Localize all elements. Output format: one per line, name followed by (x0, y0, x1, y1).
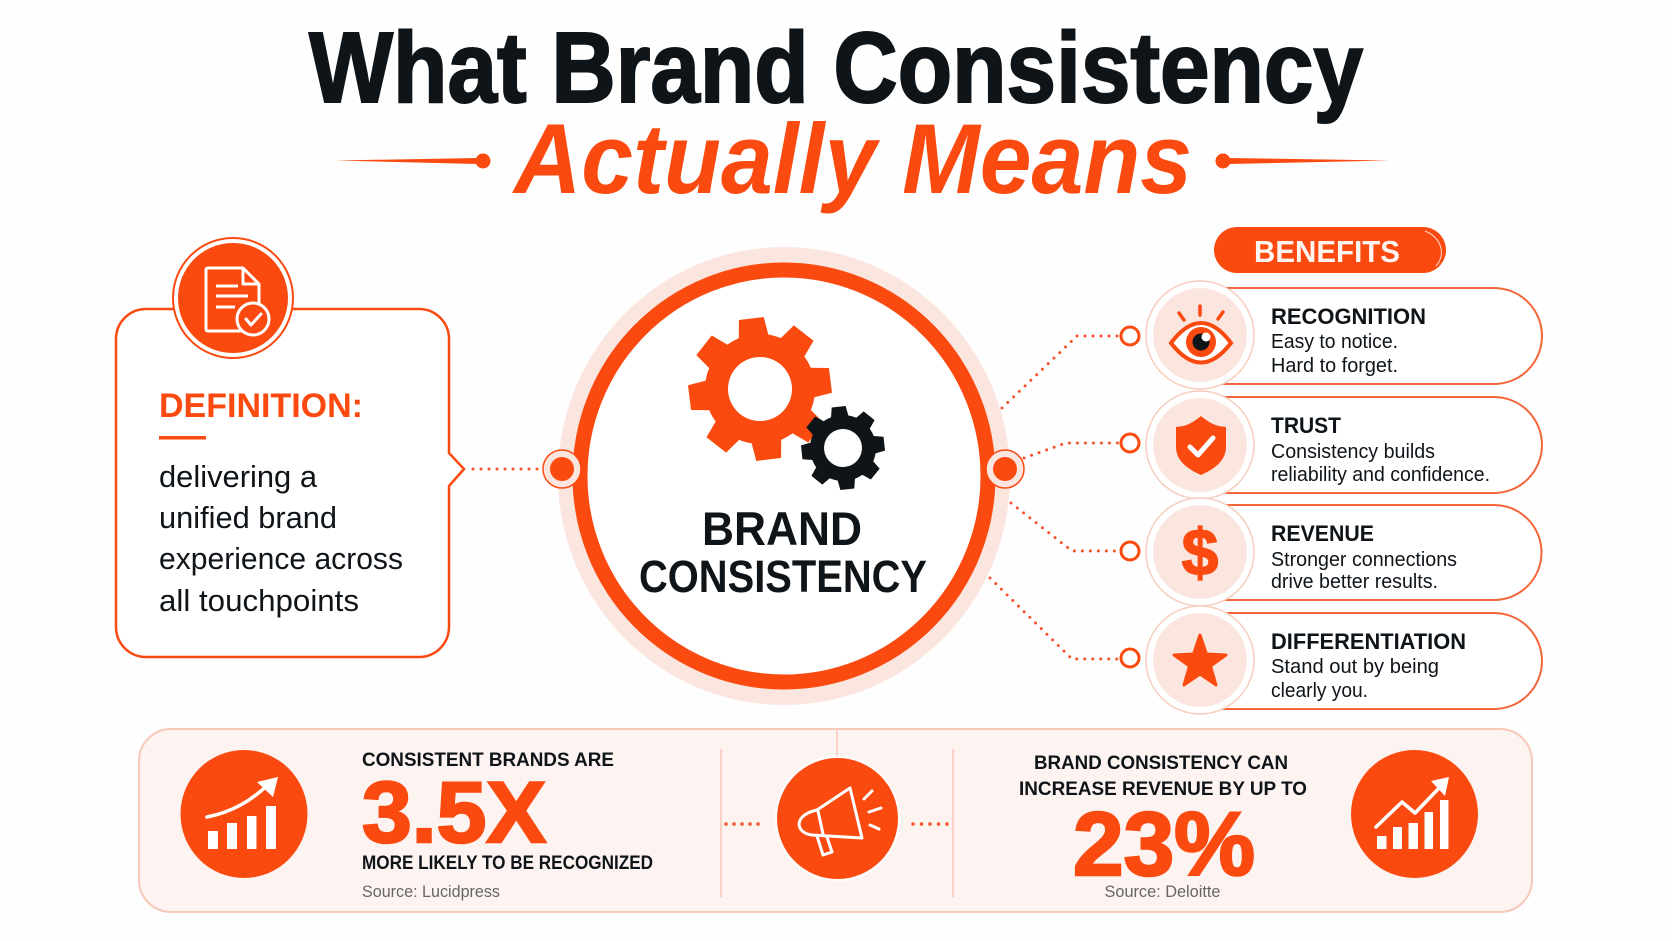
card outline (1220, 505, 1542, 600)
statistic: 23%: Source: Deloitte (1104, 883, 1220, 901)
card text: drive better results. (1271, 571, 1438, 593)
statistic: 3.5x: MORE LIKELY TO BE RECOGNIZED (362, 852, 653, 874)
panel: revenue (1121, 498, 1542, 606)
statistic: 3.5x: 3.5X (362, 765, 546, 861)
right title flourish (1216, 154, 1389, 168)
icon circle (1146, 606, 1254, 714)
card text: reliability and confidence. (1271, 464, 1490, 486)
card text (1271, 304, 1426, 377)
connectors: center to benefits (990, 336, 1119, 659)
icon: document with check (173, 238, 293, 358)
top tick (836, 729, 838, 758)
card text (1271, 629, 1466, 702)
icon circle (1146, 498, 1254, 606)
statistic: 23%: INCREASE REVENUE BY UP TO (1019, 778, 1307, 800)
left dotted connector (726, 822, 763, 826)
benefits heading pill (1214, 227, 1446, 273)
statistic: 3.5x: Source: Lucidpress (362, 883, 500, 901)
panel: differentiation (1121, 606, 1542, 714)
icon: growth chart right (1351, 750, 1478, 878)
definition body: unified brand (159, 500, 337, 535)
panel: central brand consistency circle (543, 247, 1024, 705)
card outline (1220, 288, 1542, 384)
card outline (1220, 397, 1542, 493)
panel: recognition (1121, 281, 1542, 389)
icon: shield (1176, 416, 1226, 475)
small connector ring (1121, 542, 1139, 560)
benefits heading pill: BENEFITS (1254, 234, 1400, 269)
right dotted connector (913, 822, 949, 826)
statistic: 23%: 23% (1073, 795, 1255, 895)
card text: Stand out by being (1271, 656, 1439, 678)
statistic: 23% (1019, 752, 1307, 901)
title (309, 12, 1389, 214)
icon: dollar: $ (1182, 515, 1218, 589)
statistic: 3.5x: CONSISTENT BRANDS ARE (362, 749, 614, 771)
definition body: experience across (159, 541, 403, 576)
card text: Stronger connections (1271, 549, 1457, 571)
icon: growth chart left (180, 750, 308, 878)
outer halo (558, 247, 1010, 705)
right node (986, 450, 1024, 488)
card text: clearly you. (1271, 680, 1368, 702)
small connector ring (1121, 434, 1139, 452)
card text: DIFFERENTIATION (1271, 629, 1466, 654)
icon circle (1146, 391, 1254, 499)
statistic: 3.5x (362, 749, 653, 901)
icon: black gear (797, 402, 889, 494)
icon: orange gear (681, 310, 839, 468)
panel: trust (1121, 391, 1542, 499)
title line 1: What Brand Consistency (309, 12, 1363, 124)
card text (1271, 413, 1490, 486)
icon: eye (1171, 306, 1231, 362)
panel: definition (116, 238, 464, 657)
left title flourish (336, 154, 490, 168)
small connector ring (1121, 649, 1139, 667)
card text: REVENUE (1271, 521, 1374, 546)
small connector ring (1121, 327, 1139, 345)
main ring (580, 270, 988, 682)
icon: megaphone (774, 756, 900, 882)
card text: Hard to forget. (1271, 355, 1398, 377)
heading underline (159, 436, 206, 440)
center label: CONSISTENCY (639, 551, 927, 602)
left divider (720, 749, 722, 897)
icon: star (1174, 635, 1226, 685)
card text: RECOGNITION (1271, 304, 1426, 329)
statistics background (139, 729, 1532, 912)
title line 2: Actually Means (511, 103, 1192, 214)
card text: TRUST (1271, 413, 1342, 438)
card text: Consistency builds (1271, 441, 1435, 463)
card text: Easy to notice. (1271, 331, 1398, 353)
statistic: 23%: BRAND CONSISTENCY CAN (1034, 752, 1288, 774)
panel: statistics bar (139, 729, 1532, 912)
definition heading: DEFINITION: (159, 387, 363, 425)
definition body: delivering a (159, 459, 318, 494)
definition card outline (116, 309, 464, 657)
definition body: all touchpoints (159, 583, 359, 618)
center label (639, 502, 927, 602)
card text (1271, 521, 1457, 593)
icon circle (1146, 281, 1254, 389)
left node (543, 450, 581, 488)
right divider (952, 749, 954, 897)
connector: definition to center (473, 468, 545, 470)
definition body (159, 459, 403, 618)
center label: BRAND (702, 502, 862, 555)
card outline (1220, 613, 1542, 709)
